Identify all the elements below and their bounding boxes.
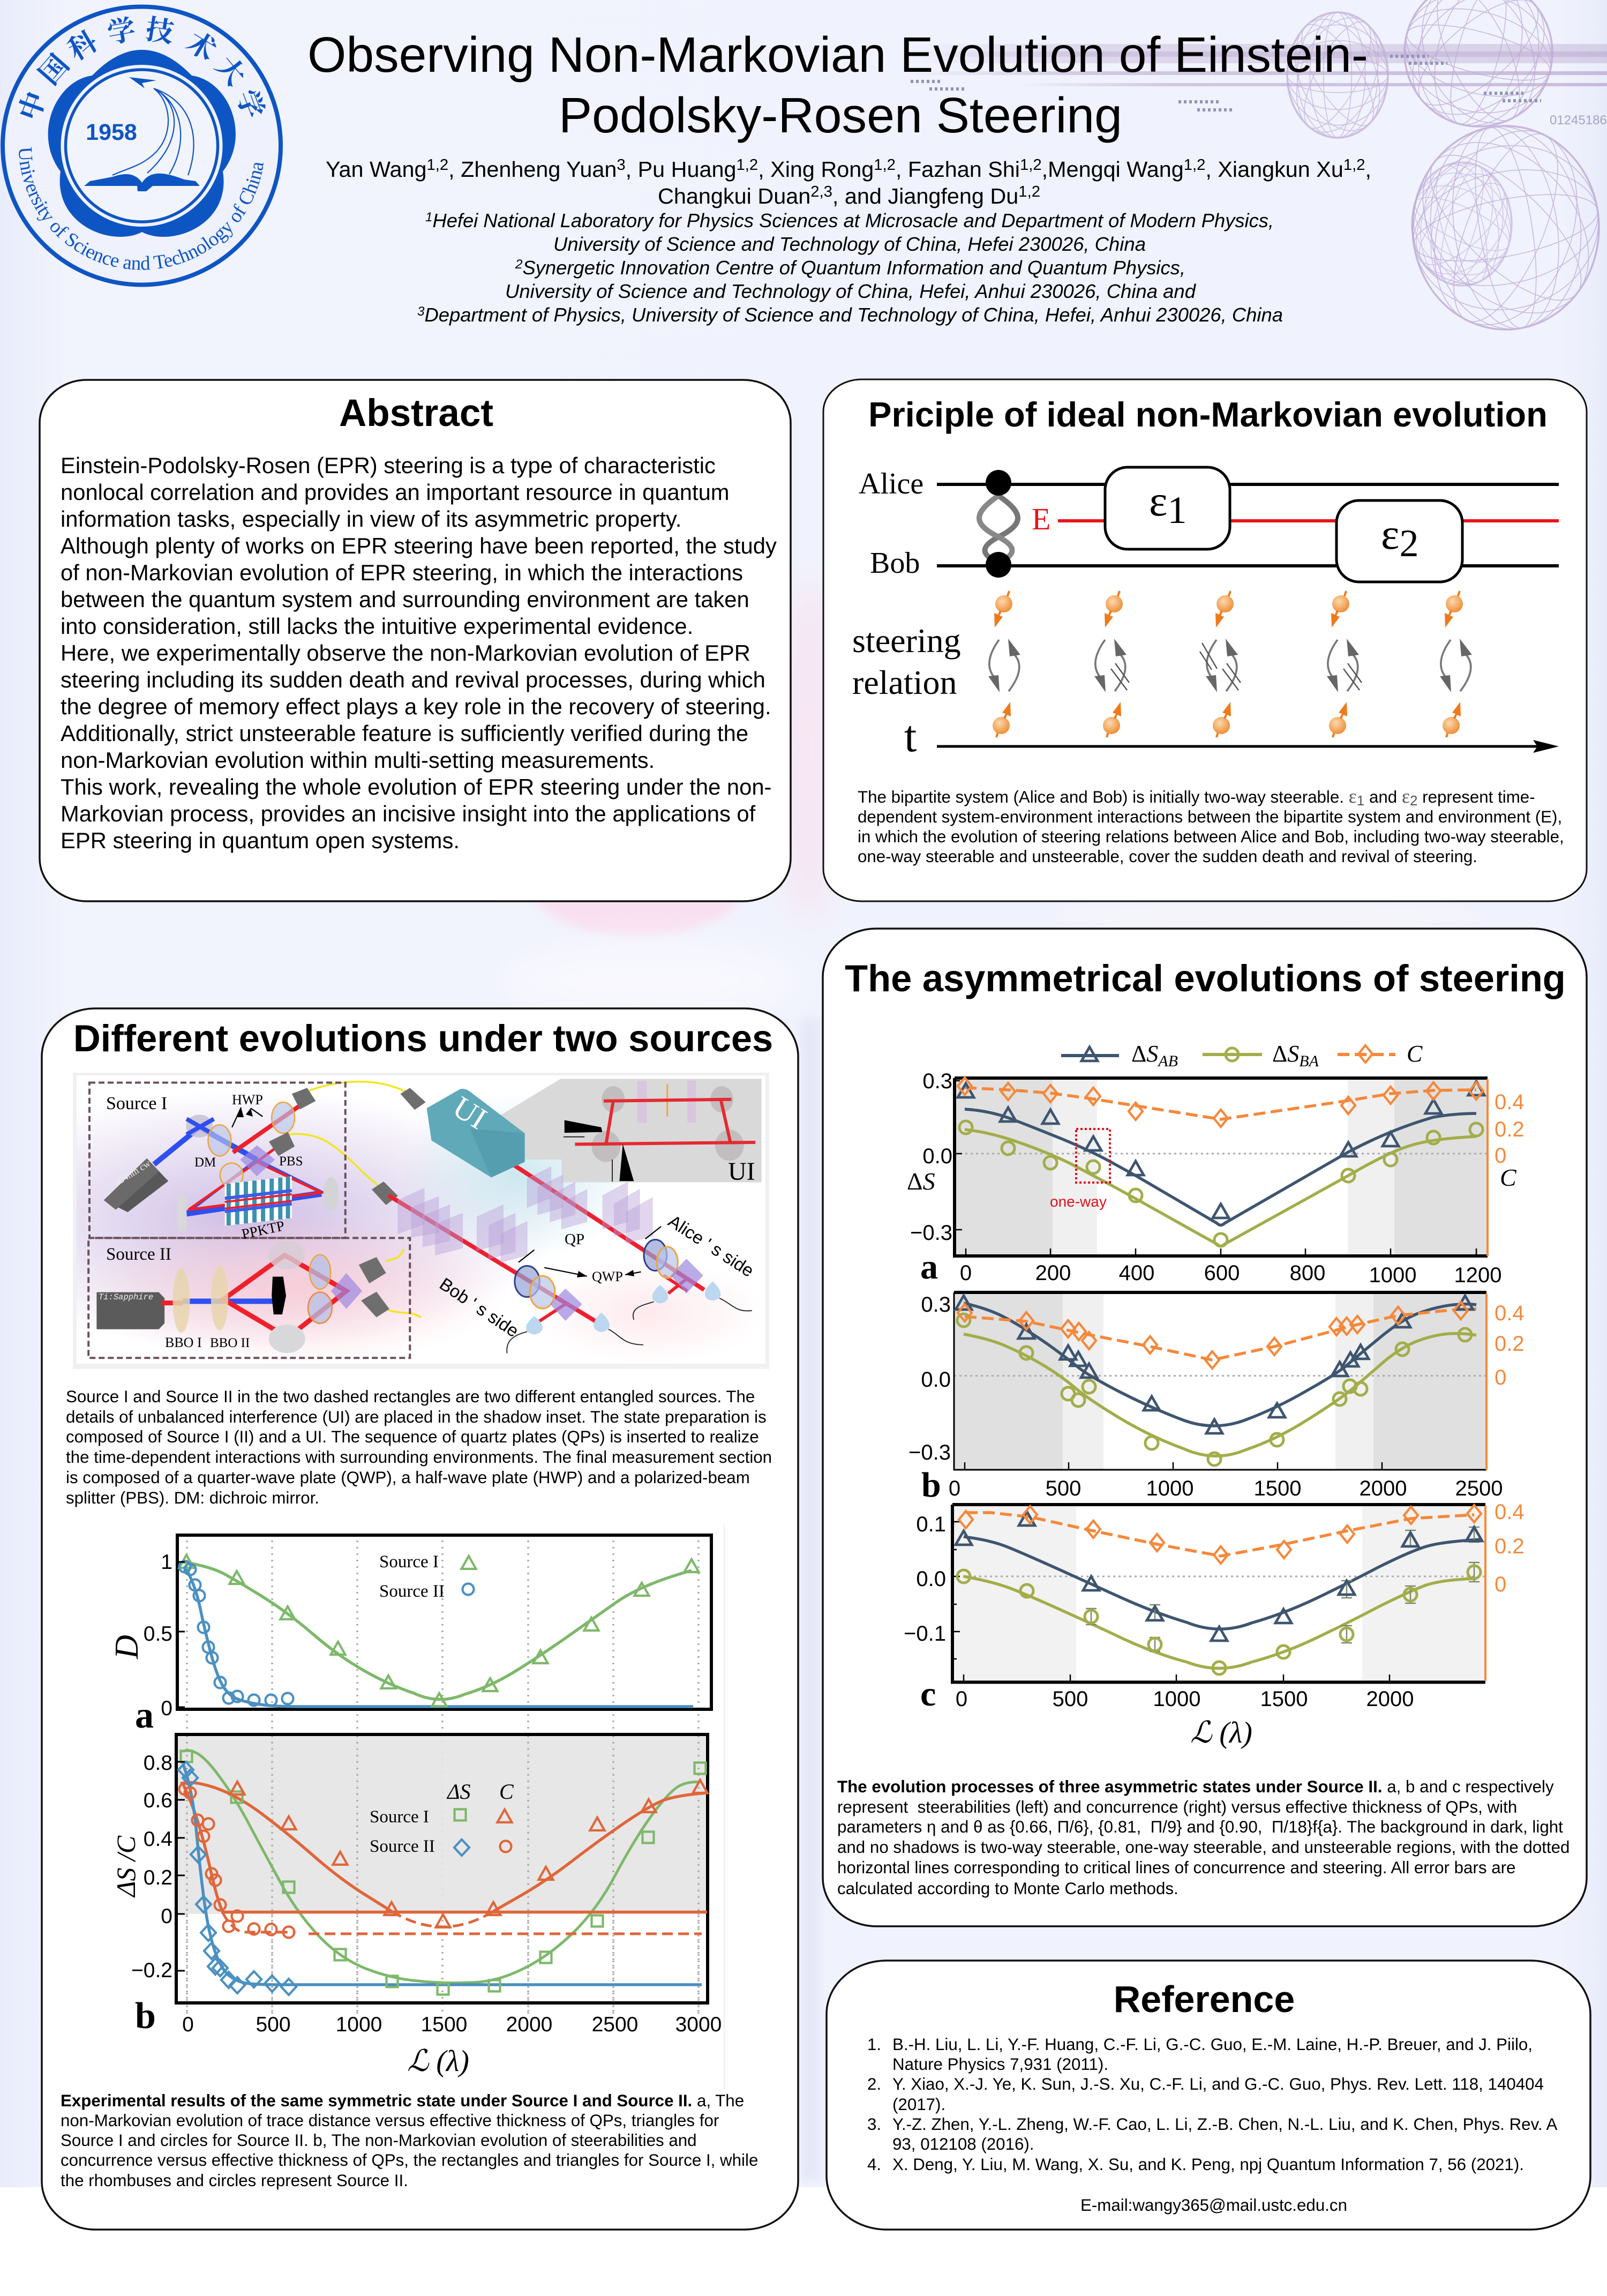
time axis: t	[904, 712, 917, 761]
chart a legend: Source I	[379, 1552, 439, 1572]
logo flower	[48, 50, 236, 237]
chart: steerability and concurrence b	[111, 1734, 722, 2078]
chart b axes: 0.2	[144, 1866, 172, 1889]
chart c: 1500	[1260, 1687, 1308, 1711]
setup labels: PBS	[279, 1154, 303, 1169]
principle heading: Priciple of ideal non-Markovian evolution	[868, 395, 1548, 434]
asymmetrical caption	[837, 1777, 1570, 1898]
chart c: 0.1	[916, 1513, 946, 1536]
beams to Alice and Bob	[513, 1164, 704, 1290]
setup caption	[66, 1387, 772, 1507]
setup labels: PPKTP	[240, 1217, 286, 1242]
abstract text: Additionally, strict unsteerable feature is sufficiently verified during the	[61, 721, 748, 746]
authors: 1,2	[1343, 156, 1365, 174]
inset interferometer	[602, 1086, 625, 1112]
chart c: 1000	[1153, 1687, 1200, 1711]
chart b: 0.2	[1495, 1332, 1525, 1356]
chart b: 0.4	[1495, 1302, 1525, 1325]
asymmetrical caption: parameters η and θ as {0.66, Π/6}, {0.81, Π/9} and {0.90, Π/18}f{a}. The background in dark, light	[837, 1818, 1563, 1836]
chart a: 600	[1204, 1261, 1240, 1285]
reference list: 2.	[867, 2075, 881, 2093]
setup labels: HWP	[232, 1092, 263, 1108]
principle caption: one-way steerable and unsteerable, cover the sudden death and revival of steering.	[858, 847, 1477, 866]
principle caption: represent time-	[1417, 788, 1535, 806]
chart a: 800	[1290, 1261, 1325, 1285]
404nm laser	[104, 1158, 168, 1212]
dashed source boxes	[89, 1082, 346, 1238]
chart b legend: C	[499, 1779, 514, 1804]
chart b legend: ΔS	[446, 1779, 470, 1804]
abstract text: the degree of memory effect plays a key role in the recovery of steering.	[61, 694, 771, 719]
chart: steerability and concurrence b: 500	[256, 2013, 291, 2036]
principle caption: dependent system-environment interactions between the bipartite system and environment (E),	[858, 807, 1562, 826]
circuit diagram: E	[1032, 502, 1050, 536]
principle caption: and	[1364, 788, 1402, 806]
chart b: 0	[949, 1477, 960, 1500]
asymmetrical caption: The evolution processes of three asymmetric states under Source II. a, b and c respectively	[837, 1777, 1554, 1796]
reference list: (2017).	[892, 2095, 945, 2114]
source I squares	[181, 1751, 706, 1994]
steering relation label	[852, 622, 961, 701]
setup labels	[99, 1089, 755, 1350]
chart a: 0	[960, 1261, 972, 1285]
chart b axes: 0.4	[144, 1828, 172, 1851]
source II circles	[179, 1783, 295, 1938]
time axis	[904, 712, 1559, 761]
results caption: Experimental results of the same symmetric state under Source I and Source II. a, The	[61, 2091, 744, 2110]
chart b axes	[131, 1752, 172, 1982]
chart: steerability and concurrence b: 3000	[675, 2013, 722, 2036]
chart: steerability and concurrence b: 1000	[336, 2013, 382, 2036]
chart a: 0.4	[1495, 1090, 1525, 1114]
Source I optics	[154, 1127, 257, 1164]
panel: reference	[827, 1961, 1590, 2230]
affiliations: University of Science and Technology of China, Hefei, Anhui 230026, China and	[505, 280, 1196, 302]
chart c: 2000	[1366, 1687, 1414, 1711]
reference list: 93, 012108 (2016).	[892, 2135, 1034, 2153]
chart: steerability and concurrence b: 1500	[421, 2013, 467, 2036]
reference heading: Reference	[1114, 1978, 1295, 2020]
setup labels: DM	[194, 1155, 216, 1170]
yellow fibres	[288, 1082, 421, 1317]
principle caption	[858, 786, 1564, 866]
logo Chinese name: 学	[104, 6, 138, 51]
abstract text: Here, we experimentally observe the non-Markovian evolution of EPR	[61, 640, 750, 665]
source I triangles	[179, 1555, 699, 1706]
legend: ΔS	[1131, 1041, 1158, 1067]
chart b: 0	[1495, 1366, 1506, 1389]
UI block	[427, 1089, 525, 1178]
chart a axes: 0	[161, 1697, 172, 1720]
abstract text: into consideration, still lacks the intuitive experimental evidence.	[61, 614, 693, 639]
setup labels: UI	[447, 1089, 493, 1136]
Alice and Bob analysers	[644, 1239, 667, 1270]
results caption: non-Markovian evolution of trace distance versus effective thickness of QPs, triangles for	[61, 2111, 719, 2130]
authors: 1,2	[1020, 156, 1042, 174]
panel: principle of ideal non-Markovian evolution	[823, 379, 1587, 901]
one-way highlight	[1076, 1129, 1110, 1183]
chart b: b	[921, 1465, 941, 1505]
principle caption: The bipartite system (Alice and Bob) is initially two-way steerable. ε	[858, 786, 1357, 807]
authors	[326, 156, 1371, 208]
authors: Changkui Duan	[658, 184, 809, 208]
asymmetrical caption: horizontal lines corresponding to critical lines of concurrence and steering. All error bars are	[837, 1858, 1515, 1877]
circuit diagram	[859, 467, 1559, 582]
chart b: 500	[1046, 1477, 1081, 1500]
Source II optics	[96, 1292, 164, 1329]
reference list: Nature Physics 7,931 (2011).	[892, 2055, 1108, 2074]
affiliations: Department of Physics, University of Science and Technology of China, Hefei, Anhui 230026, China	[425, 304, 1283, 326]
chart a legend: Source II	[379, 1582, 445, 1601]
results caption: the rhombuses and circles represent Source II.	[61, 2171, 408, 2190]
reference list: Y. Xiao, X.-J. Ye, K. Sun, J.-S. Xu, C.-F. Li, and G.-C. Guo, Phys. Rev. Lett. 118, 140404	[892, 2075, 1544, 2093]
chart a: a	[920, 1247, 938, 1287]
affiliations	[417, 210, 1283, 326]
chart: steerability and concurrence b: b	[135, 1995, 156, 2037]
reference list: X. Deng, Y. Liu, M. Wang, X. Su, and K. Peng, npj Quantum Information 7, 56 (2021).	[892, 2155, 1524, 2174]
setup labels: Source I	[106, 1094, 167, 1113]
chart b legend: Source II	[370, 1837, 435, 1856]
title: Observing Non-Markovian Evolution of Einstein-	[307, 27, 1368, 83]
chart a: one-way	[1050, 1193, 1107, 1210]
setup labels: UI	[728, 1157, 755, 1186]
asymmetrical heading: The asymmetrical evolutions of steering	[845, 957, 1566, 999]
setup labels: BBO I	[165, 1335, 202, 1350]
logo Chinese name: 学	[229, 83, 276, 123]
title	[307, 27, 1368, 143]
asymmetrical caption: and no shadows is two-way steerable, one-way steerable, and unsteerable regions, with the dotted	[837, 1838, 1570, 1857]
authors: 1,2	[874, 156, 896, 174]
authors: , Zhenheng Yuan	[448, 157, 617, 182]
chart a: 0.2	[1495, 1118, 1525, 1141]
chart c: 0	[1495, 1573, 1506, 1596]
chart: steerability and concurrence b: ΔS /C	[111, 1835, 141, 1898]
panel: asymmetrical evolutions of steering	[823, 929, 1587, 1926]
legend: ΔS	[1272, 1041, 1299, 1067]
circuit diagram: Alice	[859, 467, 923, 500]
reference list: B.-H. Liu, L. Li, Y.-F. Huang, C.-F. Li, G.-C. Guo, E.-M. Laine, H.-P. Breuer, and J. Piilo,	[892, 2035, 1533, 2054]
setup labels: Ti:Sapphire	[99, 1292, 153, 1302]
circuit diagram: ε	[1149, 476, 1167, 525]
steering relation label: steering	[852, 622, 961, 660]
e-mail: E-mail:wangy365@mail.ustc.edu.cn	[1080, 2196, 1347, 2215]
logo Chinese name: 中	[6, 85, 54, 125]
chart a: 400	[1119, 1261, 1154, 1285]
abstract text: Markovian process, provides an incisive insight into the applications of	[61, 801, 756, 826]
chart b: 1500	[1254, 1477, 1301, 1500]
chart c: 0	[956, 1687, 967, 1711]
decorative spheres and streaks	[911, 0, 1607, 371]
chart: steerability and concurrence b: ℒ (λ)	[407, 2045, 469, 2078]
source II diamonds	[178, 1762, 296, 1995]
setup labels: Source II	[106, 1245, 171, 1264]
chart: steerability and concurrence b: 2000	[506, 2013, 552, 2036]
optical setup diagram	[73, 1073, 769, 1369]
reference list: 1.	[867, 2035, 881, 2054]
setup labels: 404nm cw	[112, 1158, 152, 1188]
chart a legend	[379, 1552, 445, 1601]
results caption	[61, 2091, 758, 2190]
quartz plates	[398, 1166, 652, 1262]
chart a: 0.3	[922, 1070, 952, 1093]
legend	[1061, 1041, 1423, 1070]
circuit diagram: 1	[1167, 489, 1187, 532]
authors: 2,3	[810, 183, 832, 200]
chart b: −0.3	[908, 1441, 951, 1464]
reference list	[867, 2035, 1558, 2174]
chart c: ℒ (λ)	[1190, 1716, 1252, 1749]
chart a: 0.0	[922, 1145, 952, 1168]
setup labels: QP	[565, 1231, 584, 1248]
legend: BA	[1299, 1052, 1319, 1070]
setup caption: composed of Source I (II) and a UI. The sequence of quartz plates (QPs) is inserted to realize	[66, 1427, 759, 1446]
chart b legend	[370, 1779, 514, 1856]
reference list: 4.	[867, 2155, 881, 2174]
panel: abstract	[40, 380, 791, 901]
affiliations: Synergetic Innovation Centre of Quantum Information and Quantum Physics,	[522, 257, 1185, 279]
asymmetrical caption: represent steerabilities (left) and concurrence (right) versus effective thickness of QPs, with	[837, 1798, 1517, 1816]
chart: trace distance a	[109, 1524, 724, 2090]
results caption: Source I and circles for Source II. b, The non-Markovian evolution of steerabilities and	[61, 2131, 697, 2150]
circuit diagram: Bob	[870, 547, 920, 580]
chart a: 0	[1495, 1144, 1506, 1168]
source I triangles	[230, 1780, 707, 1927]
setup caption: splitter (PBS). DM: dichroic mirror.	[66, 1489, 319, 1507]
chart b axes: 0.8	[144, 1752, 172, 1775]
affiliations: 1	[425, 210, 432, 225]
error bars	[1086, 1527, 1480, 1651]
abstract text: nonlocal correlation and provides an important resource in quantum	[61, 480, 730, 505]
authors: , Xing Rong	[758, 157, 874, 182]
chart b legend: Source I	[370, 1807, 429, 1827]
chart a axes: 0.5	[144, 1622, 172, 1646]
chart b: 2500	[1455, 1477, 1503, 1500]
abstract text: of non-Markovian evolution of EPR steering, in which the interactions	[61, 560, 743, 585]
setup arrows	[232, 1108, 661, 1276]
authors: ,	[1365, 157, 1371, 182]
abstract text: This work, revealing the whole evolution of EPR steering under the non-	[61, 774, 771, 799]
chart b: 0.3	[921, 1293, 951, 1317]
arrowheads	[237, 1108, 634, 1277]
chart a: 1200	[1454, 1263, 1501, 1287]
setup labels: BBO II	[210, 1336, 250, 1350]
abstract text: EPR steering in quantum open systems.	[61, 828, 460, 853]
chart: steerability and concurrence b: 0	[182, 2013, 194, 2036]
different evolutions heading: Different evolutions under two sources	[73, 1017, 773, 1059]
logo Chinese name	[6, 6, 276, 125]
chart b: 0.0	[921, 1368, 951, 1392]
chart b axes: 0	[161, 1905, 172, 1928]
abstract text: non-Markovian evolution within multi-setting measurements.	[61, 747, 655, 773]
logo: University of Science and Technology of China	[1, 4, 283, 287]
chart c	[904, 1500, 1525, 1749]
authors: 1,2	[1184, 156, 1205, 174]
principle caption: in which the evolution of steering relations between Alice and Bob, including two-way steerable,	[858, 827, 1564, 846]
chart a: C	[1500, 1164, 1517, 1191]
logo Chinese name: 技	[144, 6, 177, 50]
authors: , and Jiangfeng Du	[832, 184, 1018, 208]
principle caption: ε	[1402, 786, 1410, 807]
affiliations: University of Science and Technology of China, Hefei 230026, China	[553, 233, 1146, 255]
chart a axes	[144, 1551, 172, 1720]
authors: , Xiangkun Xu	[1205, 157, 1343, 182]
chart a: −0.3	[910, 1221, 952, 1245]
abstract text: Einstein-Podolsky-Rosen (EPR) steering is a type of characteristic	[61, 453, 716, 478]
source II circles	[179, 1561, 294, 1706]
chart b: 1000	[1146, 1477, 1193, 1500]
logo Chinese name: 术	[181, 20, 225, 69]
abstract text: steering including its sudden death and revival processes, during which	[61, 667, 765, 692]
affiliations: 2	[515, 257, 522, 272]
reference list: Y.-Z. Zhen, Y.-L. Zheng, W.-F. Cao, L. Li, Z.-B. Chen, N.-L. Liu, and K. Chen, Phys. Rev. A	[892, 2115, 1558, 2134]
chart c: 0.4	[1495, 1500, 1525, 1524]
chart c: 0.2	[1495, 1535, 1525, 1558]
affiliations: 3	[417, 304, 425, 319]
abstract text: Although plenty of works on EPR steering have been reported, the study	[61, 533, 777, 558]
steering relation label: relation	[852, 663, 957, 701]
authors: ,Mengqi Wang	[1042, 157, 1184, 182]
chart b	[908, 1292, 1525, 1505]
setup caption: is composed of a quarter-wave plate (QWP), a half-wave plate (HWP) and a polarized-beam	[66, 1468, 750, 1487]
logo Chinese name: 科	[59, 19, 103, 68]
reference list: 3.	[867, 2115, 881, 2134]
chart a: 200	[1035, 1261, 1071, 1285]
authors: , Pu Huang	[626, 157, 736, 182]
abstract heading: Abstract	[339, 392, 493, 435]
principle caption: 2	[1410, 792, 1417, 809]
logo English name: University of Science and Technology of China	[19, 147, 264, 270]
optical setup diagram: Alice ' s side	[665, 1211, 757, 1281]
panel: different evolutions under two sources	[42, 1008, 798, 2230]
legend: C	[1407, 1041, 1423, 1067]
chart b axes: 0.6	[144, 1789, 172, 1812]
chart c: 0.0	[916, 1567, 946, 1591]
setup caption: Source I and Source II in the two dashed rectangles are two different entangled sources. The	[66, 1387, 755, 1406]
setup caption: the time-dependent interactions with surrounding environments. The final measurement section	[66, 1448, 772, 1467]
results caption: concurrence versus effective thickness of QPs, the rectangles and triangles for Source I, while	[61, 2151, 758, 2170]
chart a axes: 1	[161, 1551, 172, 1574]
chart: trace distance a: D	[109, 1635, 145, 1659]
affiliations: Hefei National Laboratory for Physics Sciences at Microsacle and Department of Modern Physics,	[432, 210, 1274, 231]
authors: Yan Wang	[326, 157, 426, 182]
circuit diagram: ε	[1381, 510, 1399, 558]
chart a: 1000	[1369, 1263, 1416, 1287]
spins and steering arrows	[988, 591, 1472, 737]
chart c: −0.1	[904, 1622, 946, 1646]
PPKTP crystal	[225, 1176, 292, 1226]
circuit diagram: 2	[1399, 522, 1418, 565]
chart: steerability and concurrence b: 2500	[592, 2013, 638, 2036]
chart c: c	[920, 1674, 936, 1714]
title: Podolsky-Rosen Steering	[559, 87, 1122, 143]
chart: trace distance a: a	[135, 1695, 154, 1736]
abstract text: information tasks, especially in view of its asymmetric property.	[61, 506, 681, 532]
authors: 3	[617, 156, 626, 174]
authors: 1,2	[426, 156, 448, 174]
authors: , Fazhan Shi	[896, 157, 1020, 182]
chart b axes: −0.2	[131, 1959, 172, 1982]
chart a	[907, 1070, 1525, 1287]
principle caption: 1	[1357, 792, 1364, 809]
legend: AB	[1157, 1052, 1178, 1070]
chart b: 2000	[1360, 1477, 1407, 1500]
logo Chinese name: 大	[208, 46, 257, 93]
logo: University of Science and Technology of China: 1958	[86, 119, 137, 145]
logo Chinese name: 国	[28, 44, 77, 92]
asymmetrical caption: calculated according to Monte Carlo methods.	[837, 1879, 1178, 1898]
abstract text: between the quantum system and surrounding environment are taken	[61, 587, 749, 612]
optical setup diagram: Bob ' s side	[436, 1274, 522, 1341]
abstract text	[61, 453, 777, 853]
chart a: ΔS	[907, 1168, 935, 1195]
setup labels: QWP	[592, 1269, 623, 1284]
fibre couplers	[269, 1088, 426, 1317]
authors: 1,2	[1018, 183, 1040, 200]
chart c: 500	[1053, 1687, 1088, 1711]
UI inset shadow	[475, 1079, 762, 1182]
setup caption: details of unbalanced interference (UI) are placed in the shadow inset. The state preparation is	[66, 1408, 767, 1426]
authors: 1,2	[736, 156, 758, 174]
